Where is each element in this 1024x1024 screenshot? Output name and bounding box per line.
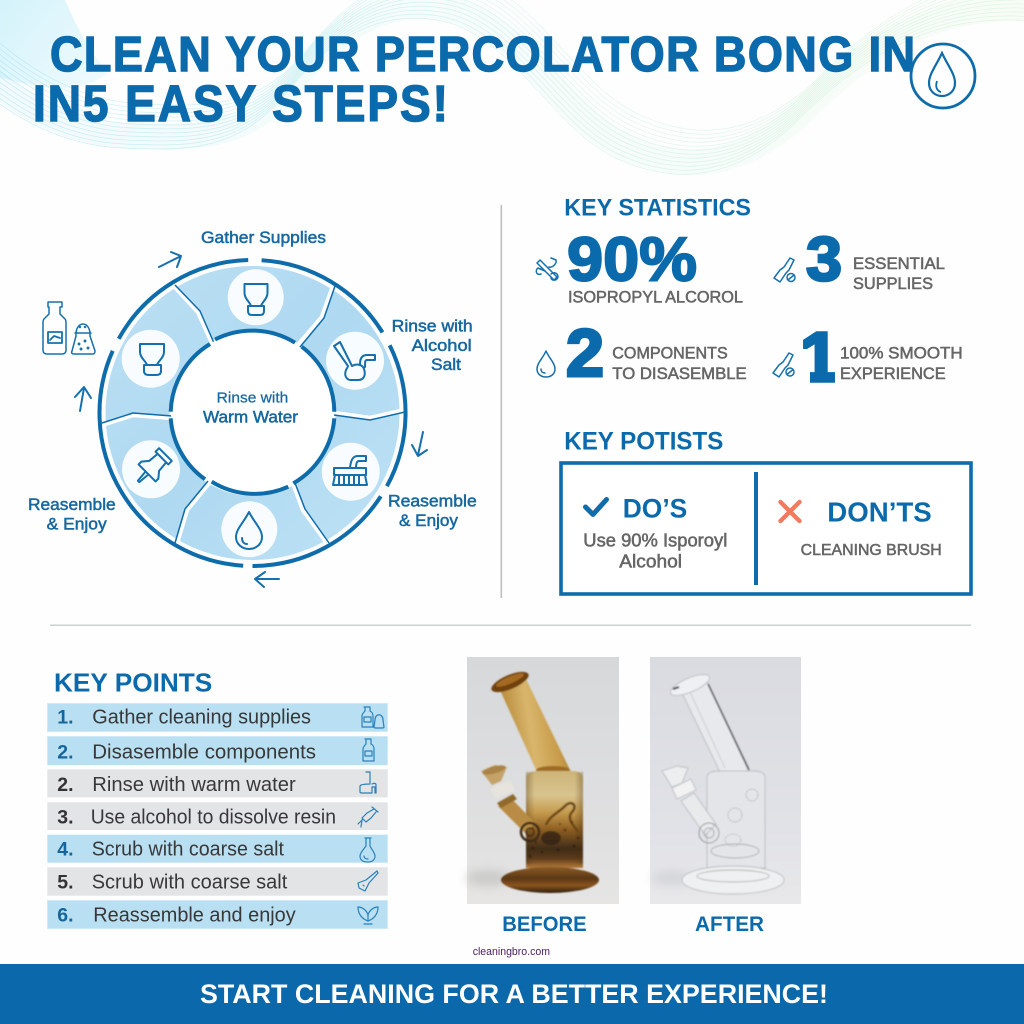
stat: 3: ESSENTIAL bbox=[853, 255, 945, 273]
icon: cross bbox=[780, 502, 800, 521]
row 1: 1. bbox=[57, 706, 74, 728]
label: gather supplies: Gather Supplies bbox=[201, 229, 326, 247]
arrow: left bbox=[75, 387, 91, 411]
arrow: right bbox=[412, 432, 427, 456]
title: IN5 EASY STEPS! bbox=[33, 76, 448, 133]
row 2 bbox=[47, 736, 388, 765]
row 5 bbox=[47, 835, 388, 863]
label: before: BEFORE bbox=[502, 912, 587, 936]
label: reassemble right: Reasemble bbox=[388, 493, 477, 511]
panel: do's and don'ts bbox=[561, 427, 971, 594]
icon: water drop badge bbox=[911, 44, 975, 108]
inner disc bbox=[171, 332, 333, 494]
row 7: 6. bbox=[57, 905, 74, 927]
row 3: 2. bbox=[57, 774, 74, 796]
stat: 2: TO DISASEMBLE bbox=[612, 365, 747, 383]
row 6: Scrub with coarse salt bbox=[92, 871, 288, 893]
stat: 90% bbox=[567, 226, 743, 307]
label: reassemble left bbox=[28, 496, 116, 534]
icon: check bbox=[586, 500, 606, 514]
row 1: Gather cleaning supplies bbox=[92, 706, 311, 728]
title: CLEAN YOUR PERCOLATOR BONG IN bbox=[50, 27, 915, 83]
icon: scrub brush bbox=[322, 443, 380, 501]
heading: key statistics: KEY STATISTICS bbox=[564, 194, 751, 221]
text: do's detail: Use 90% Isporoyl bbox=[583, 531, 727, 551]
row 2: 2. bbox=[57, 741, 74, 763]
heading: don'ts: DON’TS bbox=[827, 497, 932, 528]
footer banner bbox=[0, 964, 1024, 1024]
center label: Rinse with bbox=[217, 391, 288, 407]
stat: 2: COMPONENTS bbox=[612, 344, 728, 362]
icon: brush and pill bbox=[773, 353, 794, 377]
icon: bong bbox=[326, 332, 384, 390]
row 3: Rinse with warm water bbox=[92, 774, 296, 796]
panel: cleaning cycle wheel bbox=[28, 229, 477, 587]
icon: brush and pill bbox=[774, 258, 795, 282]
label: reassemble left: Reasemble bbox=[28, 496, 116, 514]
row 4: Use alcohol to dissolve resin bbox=[91, 806, 336, 828]
row 1 bbox=[47, 703, 388, 732]
center label: Warm Water bbox=[203, 409, 299, 427]
row 3 bbox=[47, 769, 388, 797]
label: after: AFTER bbox=[695, 912, 764, 936]
vertical divider bbox=[500, 205, 502, 598]
heading: do's: DO’S bbox=[623, 493, 687, 523]
icon: funnel left bbox=[122, 330, 180, 388]
heading: key potists: KEY POTISTS bbox=[564, 427, 723, 455]
stat: 90%: ISOPROPYL ALCOROL bbox=[568, 289, 743, 307]
arrow: bottom bbox=[255, 572, 279, 587]
label: reassemble right bbox=[388, 493, 477, 530]
outer ring bbox=[99, 260, 406, 566]
center label bbox=[203, 391, 299, 427]
ring segments bbox=[102, 285, 405, 543]
horizontal divider bbox=[50, 624, 971, 626]
stat: 1: EXPERIENCE bbox=[840, 365, 946, 383]
row 2: Disasemble components bbox=[92, 741, 316, 763]
photo: before bbox=[466, 657, 619, 904]
text: do's detail bbox=[583, 531, 727, 572]
row 7 bbox=[47, 900, 388, 929]
icon: funnel top bbox=[228, 269, 284, 325]
stat: 1: 1 bbox=[800, 318, 839, 396]
row 5: 4. bbox=[57, 839, 74, 861]
stat: 90%: 90% bbox=[567, 226, 697, 294]
label: rinse with alcohol salt: Rinse with bbox=[392, 318, 473, 336]
row 4: 3. bbox=[57, 806, 74, 828]
icon: drop bbox=[221, 501, 277, 557]
label: reassemble right: & Enjoy bbox=[399, 512, 459, 530]
row 6 bbox=[47, 867, 388, 896]
icon: drop bbox=[537, 351, 555, 377]
panel: key statistics bbox=[536, 194, 963, 396]
row 4 bbox=[47, 802, 388, 830]
label: rinse with alcohol salt: Alcohol bbox=[412, 337, 472, 355]
stat: 3: 3 bbox=[806, 226, 842, 294]
row 6: 5. bbox=[57, 871, 74, 893]
stat: 1 bbox=[803, 331, 962, 383]
source credit: cleaningbro.com bbox=[473, 946, 550, 958]
footer banner: START CLEANING FOR A BETTER EXPERIENCE! bbox=[200, 979, 828, 1009]
arrow: top bbox=[159, 252, 181, 267]
icon: push pin bbox=[122, 440, 180, 498]
icon: bottle and salt shaker bbox=[43, 302, 95, 354]
label: rinse with alcohol salt: Salt bbox=[431, 356, 461, 374]
stat: 3 bbox=[806, 226, 945, 294]
icon: crossed leaves bbox=[536, 258, 558, 280]
photo: after bbox=[650, 657, 801, 904]
inner ring bbox=[171, 331, 334, 494]
stat: 2: 2 bbox=[566, 316, 604, 391]
stat: 1: 100% SMOOTH bbox=[840, 344, 963, 362]
box frame bbox=[561, 463, 971, 594]
stat: 3: SUPPLIES bbox=[853, 275, 933, 293]
row 7: Reassemble and enjoy bbox=[93, 905, 296, 927]
heading: key points: KEY POINTS bbox=[54, 668, 212, 698]
stat: 2 bbox=[566, 316, 747, 391]
panel: key points bbox=[47, 668, 388, 929]
label: rinse with alcohol salt bbox=[392, 318, 473, 374]
text: do's detail: Alcohol bbox=[619, 552, 682, 572]
text: don'ts detail: CLEANING BRUSH bbox=[801, 542, 942, 559]
title bbox=[33, 27, 915, 133]
row 5: Scrub with coarse salt bbox=[92, 839, 284, 861]
label: reassemble left: & Enjoy bbox=[47, 516, 107, 534]
